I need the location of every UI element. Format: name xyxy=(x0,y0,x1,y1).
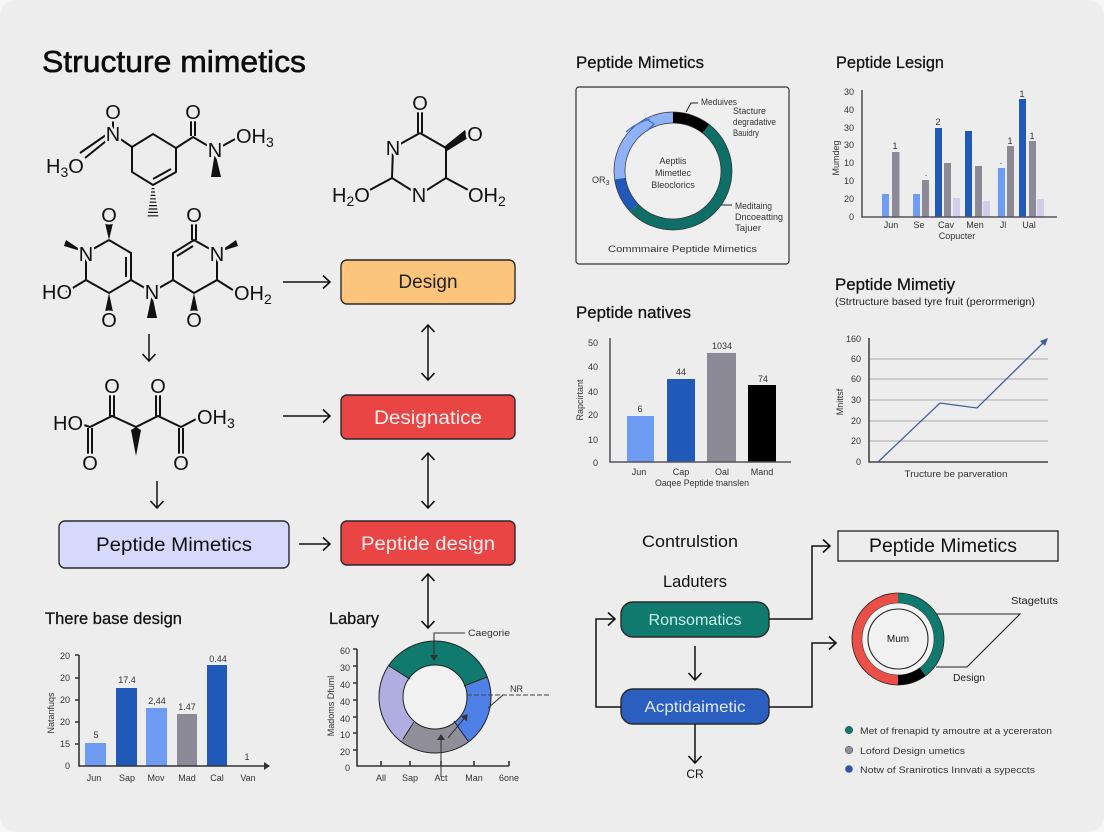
arrow: acptidaimetic to ring xyxy=(769,643,836,707)
donut center label: Aeptlis xyxy=(659,156,687,166)
panel: peptide lesign bar chart: 30 xyxy=(844,123,854,133)
panel: labary donut chart: 20 xyxy=(340,747,350,757)
legend xyxy=(845,726,1052,775)
donut center label xyxy=(651,156,695,190)
panel: labary donut chart: Sap xyxy=(402,773,418,783)
panel: peptide natives bar chart: 40 xyxy=(588,362,598,372)
panel: peptide natives bar chart xyxy=(575,303,791,488)
heading: Peptide Mimetics xyxy=(576,53,704,72)
box: peptide mimetics outline: Peptide Mimetics xyxy=(869,536,1017,557)
molecule: cyclohexene amide: OH xyxy=(236,126,266,148)
legend: Loford Design umetics xyxy=(860,746,966,756)
molecule: diketo acid: 3 xyxy=(227,415,235,431)
callouts: Meditaing xyxy=(735,201,772,211)
heading: Peptide Mimetiy xyxy=(835,275,955,294)
panel: there base design chart: 15 xyxy=(60,739,70,749)
donut xyxy=(614,112,732,230)
panel: peptide lesign bar chart: 2 xyxy=(935,117,941,127)
molecule: pyrimidinone: O xyxy=(354,185,370,207)
heading: Peptide Lesign xyxy=(836,53,944,72)
panel: peptide mimetiy line chart: 0 xyxy=(856,457,861,467)
panel: peptide lesign bar chart: · xyxy=(924,170,928,180)
box: designatice xyxy=(341,395,515,439)
panel: there base design chart: 5 xyxy=(93,730,99,740)
molecule: cyclohexene amide: O xyxy=(68,156,84,178)
donut center label: Bleoclorics xyxy=(651,180,695,190)
panel: peptide mimetiy line chart: 60 xyxy=(851,374,861,384)
molecule: diketo acid: O xyxy=(104,376,120,398)
molecule: cyclohexene amide: O xyxy=(185,102,201,124)
molecule: bis-pyridinone amine: O xyxy=(186,310,202,332)
callout lines xyxy=(936,614,1020,667)
panel: peptide mimetiy line chart: 60 xyxy=(851,354,861,364)
panel: there base design chart: 0.44 xyxy=(209,654,227,664)
molecule: bis-pyridinone amine: O xyxy=(186,205,202,227)
panel: labary donut chart xyxy=(326,609,550,783)
label: stagetuts: Stagetuts xyxy=(1011,596,1058,607)
molecule: bis-pyridinone amine: O xyxy=(101,310,117,332)
panel: there base design chart: Jun xyxy=(87,773,101,783)
panel: peptide mimetics donut card xyxy=(576,53,789,264)
panel: peptide natives bar chart: Mand xyxy=(751,467,773,477)
box: peptide mimetics xyxy=(59,521,289,568)
panel: peptide lesign bar chart: Men xyxy=(966,220,984,230)
box: ronsomatics: Ronsomatics xyxy=(648,612,742,629)
arrow: double design xyxy=(427,325,429,380)
panel: peptide natives bar chart: 44 xyxy=(676,367,686,377)
arrow: feedback loop xyxy=(596,619,621,707)
heading: Peptide natives xyxy=(576,303,691,322)
panel: peptide natives bar chart: 10 xyxy=(588,435,598,445)
panel: labary donut chart: All xyxy=(376,773,386,783)
panel: labary donut chart: 10 xyxy=(340,730,350,740)
arrow: to designatice xyxy=(283,415,330,417)
arrow: to peptide design xyxy=(299,543,330,545)
molecule: cyclohexene amide: N xyxy=(208,140,222,162)
ring xyxy=(852,593,944,685)
molecule: cyclohexene amide: H xyxy=(46,156,60,178)
arrow: ronsomatics to peptide mimetics xyxy=(769,546,830,619)
panel: peptide lesign bar chart: 1 xyxy=(1019,89,1025,99)
panel: peptide mimetiy line chart: 160 xyxy=(846,334,861,344)
molecule: pyrimidinone: 2 xyxy=(346,193,354,209)
panel: stages ring xyxy=(852,593,1058,685)
molecule: bis-pyridinone amine: N xyxy=(79,244,93,266)
panel: peptide mimetiy line chart: 20 xyxy=(851,416,861,426)
panel: peptide lesign bar chart: · xyxy=(1000,158,1002,168)
panel: peptide lesign bar chart: 1 xyxy=(1007,136,1013,146)
molecule: diketo acid: O xyxy=(173,453,189,475)
panel: labary donut chart: 40 xyxy=(340,680,350,690)
callouts: Stacture xyxy=(733,106,766,116)
donut center label: Mimetlec xyxy=(655,168,691,178)
panel: peptide natives bar chart: 50 xyxy=(588,338,598,348)
callouts: Dncoeatting xyxy=(735,212,783,222)
panel: peptide lesign bar chart: Se xyxy=(913,220,925,230)
panel: there base design chart: Sap xyxy=(119,773,135,783)
panel: peptide natives bar chart: Oal xyxy=(715,467,729,477)
molecule: diketo acid: O xyxy=(82,453,98,475)
panel: there base design chart: Cal xyxy=(210,773,224,783)
molecule: pyrimidinone: O xyxy=(412,93,428,115)
panel: peptide natives bar chart: Rapcirtant xyxy=(575,379,585,421)
panel: peptide lesign bar chart: 30 xyxy=(844,87,854,97)
panel: labary donut chart: 40 xyxy=(340,714,350,724)
callouts: OR xyxy=(592,175,606,185)
callouts xyxy=(592,97,783,233)
molecule: pyrimidinone: 2 xyxy=(498,193,506,209)
legend: Met of frenapid ty amoutre at a ycereraton xyxy=(860,726,1052,736)
callouts: Tajuer xyxy=(735,223,761,233)
box: acptidaimetic xyxy=(621,689,769,724)
axes xyxy=(79,655,269,766)
panel: peptide lesign bar chart: 10 xyxy=(844,176,854,186)
panel: peptide natives bar chart: 74 xyxy=(758,374,768,384)
bars xyxy=(85,665,227,766)
panel: there base design chart: 1 xyxy=(244,752,250,762)
molecule: cyclohexene amide: 3 xyxy=(60,164,68,180)
box: acptidaimetic: Acptidaimetic xyxy=(644,699,746,716)
panel: peptide mimetiy line chart: Mnittsf xyxy=(835,388,845,415)
molecule: diketo acid xyxy=(53,376,235,475)
legend: Notw of Sranirotics Innvati a sypeccts xyxy=(860,765,1036,775)
subheading: (Strtructure based tyre fruit (perorrmerign) xyxy=(835,296,1035,308)
caption: Commmaire Peptide Mimetics xyxy=(608,244,758,254)
panel: peptide lesign bar chart: 0 xyxy=(849,212,854,222)
molecule: bis-pyridinone amine xyxy=(42,205,272,332)
panel: labary donut chart: 30 xyxy=(340,663,350,673)
panel: peptide lesign bar chart: 1 xyxy=(1029,131,1035,141)
callouts: Caegorie xyxy=(468,628,510,638)
panel: peptide lesign bar chart: Jl xyxy=(1000,220,1006,230)
panel: labary donut chart: Madoms Dfuml xyxy=(326,676,336,736)
panel: peptide mimetiy line chart xyxy=(835,275,1048,479)
panel: peptide lesign bar chart: Ual xyxy=(1022,220,1036,230)
molecule: cyclohexene amide: 3 xyxy=(266,134,274,150)
molecule: pyrimidinone: N xyxy=(412,185,426,207)
panel: labary donut chart: 40 xyxy=(340,697,350,707)
molecule: bis-pyridinone amine: O xyxy=(101,205,117,227)
arrow: down to peptide mimetics xyxy=(156,481,158,508)
panel: there base design chart: 20 xyxy=(60,695,70,705)
bars xyxy=(882,99,1044,217)
panel: there base design chart xyxy=(45,609,269,783)
callouts: Bauidry xyxy=(733,128,759,138)
box: designatice: Designatice xyxy=(374,408,482,429)
arrow: molecule down xyxy=(148,334,150,361)
molecule: bis-pyridinone amine: N xyxy=(210,244,224,266)
panel: labary donut chart: Act xyxy=(434,773,448,783)
molecule: diketo acid: O xyxy=(150,376,166,398)
panel: there base design chart: 1.47 xyxy=(178,702,196,712)
box: peptide design xyxy=(341,521,515,565)
panel: peptide natives bar chart: Oaqee Peptide tnanslen xyxy=(655,478,749,488)
panel: peptide natives bar chart: 6 xyxy=(637,404,643,414)
molecule: diketo acid: OH xyxy=(197,407,227,429)
panel: there base design chart: 0 xyxy=(65,761,70,771)
molecule: pyrimidinone: O xyxy=(467,124,483,146)
callouts: 3 xyxy=(606,180,610,187)
panel: peptide lesign bar chart: Mumdeg xyxy=(831,140,841,176)
box: peptide mimetics outline xyxy=(838,531,1058,561)
arrow: double peptide design xyxy=(427,574,429,628)
ring arrow xyxy=(626,118,654,132)
panel: there base design chart: 20 xyxy=(60,717,70,727)
molecule: bis-pyridinone amine: HO xyxy=(42,282,72,304)
box: design xyxy=(341,260,515,304)
heading: Labary xyxy=(329,609,379,628)
molecule: cyclohexene amide: O xyxy=(105,102,121,124)
bars xyxy=(627,353,776,462)
panel: labary donut chart: Man xyxy=(465,773,483,783)
panel: peptide natives bar chart: 40 xyxy=(588,387,598,397)
callouts: degradative xyxy=(733,117,776,127)
callouts xyxy=(434,628,550,777)
panel: there base design chart: Mad xyxy=(178,773,196,783)
molecule: pyrimidinone: H xyxy=(332,185,346,207)
molecule: cyclohexene amide: N xyxy=(106,124,120,146)
trend line xyxy=(878,341,1045,462)
panel: there base design chart: 20 xyxy=(60,673,70,683)
trend arrowhead xyxy=(1040,338,1048,346)
panel: there base design chart: 17.4 xyxy=(118,675,136,685)
panel: labary donut chart: 60 xyxy=(340,646,350,656)
label: CR: CR xyxy=(686,767,704,781)
molecule: cyclohexene amide xyxy=(46,102,274,217)
arrow: to design xyxy=(283,281,330,283)
panel: peptide natives bar chart: Cap xyxy=(673,467,689,477)
panel: peptide mimetiy line chart: 30 xyxy=(851,395,861,405)
panel: peptide natives bar chart: Jun xyxy=(632,467,646,477)
molecule: bis-pyridinone amine: OH xyxy=(234,283,264,305)
panel: peptide mimetiy line chart: 20 xyxy=(851,436,861,446)
box: ronsomatics xyxy=(621,602,769,637)
molecule: pyrimidinone: OH xyxy=(468,185,498,207)
callouts: Meduives xyxy=(701,97,737,107)
panel: there base design chart: Van xyxy=(240,773,256,783)
box: peptide design: Peptide design xyxy=(361,534,495,555)
panel: peptide lesign bar chart: 30 xyxy=(844,140,854,150)
panel: peptide lesign bar chart: Copucter xyxy=(939,231,975,241)
ring center label: Mum xyxy=(887,634,909,645)
panel: peptide lesign bar chart: Jun xyxy=(884,220,898,230)
heading: laduters: Laduters xyxy=(663,572,727,591)
panel: there base design chart: Mov xyxy=(147,773,165,783)
molecule: bis-pyridinone amine: 2 xyxy=(264,291,272,307)
panel: peptide lesign bar chart: 40 xyxy=(844,105,854,115)
arrow: acptidaimetic to CR xyxy=(694,724,696,763)
panel: there base design chart: 20 xyxy=(60,651,70,661)
panel: peptide lesign bar chart: Cav xyxy=(938,220,954,230)
panel: peptide lesign bar chart: 10 xyxy=(844,158,854,168)
box: peptide mimetics: Peptide Mimetics xyxy=(96,535,252,556)
molecule: pyrimidinone xyxy=(332,93,506,209)
label: design: Design xyxy=(953,672,985,684)
heading: contrulstion: Contrulstion xyxy=(642,532,738,551)
panel: peptide lesign bar chart: 1 xyxy=(892,141,898,151)
molecule: bis-pyridinone amine: N xyxy=(145,282,159,304)
panel: peptide natives bar chart: 0 xyxy=(593,458,598,468)
panel: peptide lesign bar chart xyxy=(831,53,1057,241)
panel: peptide lesign bar chart: 20 xyxy=(844,194,854,204)
title: Structure mimetics xyxy=(42,44,306,79)
panel: labary donut chart: 0 xyxy=(345,763,350,773)
panel: peptide natives bar chart: 20 xyxy=(588,410,598,420)
arrow: double designatice xyxy=(427,453,429,508)
box: design: Design xyxy=(398,272,458,293)
heading: There base design xyxy=(45,609,182,628)
molecule: pyrimidinone: N xyxy=(386,138,400,160)
molecule: diketo acid: HO xyxy=(53,413,83,435)
panel: peptide natives bar chart: 1034 xyxy=(712,341,732,351)
donut xyxy=(379,641,491,753)
callouts: NR xyxy=(510,684,523,694)
panel: there base design chart: Natanfuqs xyxy=(46,692,56,734)
panel: labary donut chart: 6one xyxy=(499,773,519,783)
panel: there base design chart: 2,44 xyxy=(148,696,166,706)
panel: peptide mimetiy line chart: Tructure be parveration xyxy=(904,469,1008,479)
arrow: ronsomatics to acptidaimetic xyxy=(694,646,696,680)
card xyxy=(576,87,789,264)
